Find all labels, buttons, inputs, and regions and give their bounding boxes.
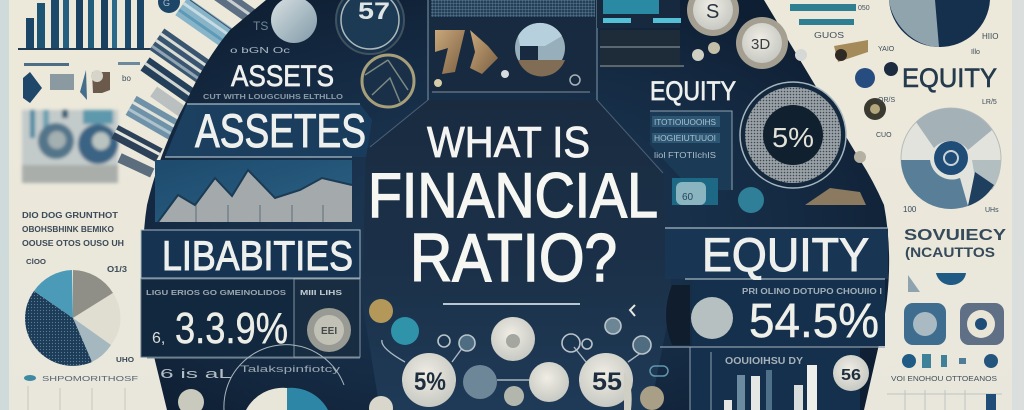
coin: 3D: 3D [751, 36, 770, 53]
value: 54.5%: 54.5% [749, 295, 879, 348]
lower left formula scribbles: 6 is aL [160, 366, 232, 381]
top right bars: GUOS [814, 31, 844, 40]
icons below dial [738, 151, 866, 213]
panel: equity list: HOGIEIUTUUOI [654, 134, 716, 143]
heading: small assets: ASSETS [231, 60, 334, 93]
heading: what is: WHAT IS [427, 118, 590, 167]
left notes text: ClOO [26, 259, 47, 266]
right solvency label: UHs [985, 207, 999, 214]
left line chart caption: SHPOMORITHOSF [42, 376, 138, 383]
amber coin [369, 299, 393, 323]
coin: S [687, 0, 739, 36]
left small icons: bo [122, 74, 131, 83]
panel: equity list: ITOTIOIUOOIHS [654, 118, 716, 127]
panel: 54.5 percent [660, 280, 885, 348]
top right pie: HIIO [982, 32, 998, 41]
coin: 56: 56 [841, 367, 861, 384]
main dark disc [143, 0, 889, 410]
right solvency label [903, 205, 1006, 260]
scribbles near assets [230, 19, 290, 55]
heading: right equity: EQUITY [902, 63, 997, 93]
right gauge diagram: LR/5 [982, 99, 997, 106]
panel: 3.3.9 percent: MIII LIHS [300, 290, 342, 297]
scribbles near assets: TS [253, 19, 268, 33]
icon: device: 60 [682, 192, 694, 203]
badge: 57 [336, 0, 404, 54]
coin: 55: 55 [592, 368, 622, 396]
coin: center top [491, 317, 535, 361]
left small icons [23, 62, 140, 103]
heading: assetes: ASSETES [195, 104, 366, 157]
left photo panel [22, 110, 118, 183]
coin: mid [529, 362, 569, 402]
value: 3.3.9%: 3.3.9% [175, 304, 288, 353]
icon: device [672, 178, 718, 205]
lower left pie [224, 345, 344, 410]
small coin bottom [504, 386, 524, 406]
top right bars [790, 4, 870, 40]
left notes text: OBOHSBHINK BEMIKO [22, 225, 114, 234]
icon: gold numerals [435, 30, 498, 74]
silver ball top [271, 0, 317, 43]
coin low left [178, 389, 393, 410]
coin: 5 percent [402, 353, 456, 407]
small glyph at top left [158, 0, 180, 13]
left line chart caption [24, 375, 138, 410]
left notes text: OOUSE OTOS OUSO UH [22, 239, 124, 248]
top right pie: Illo [971, 49, 980, 56]
panel: area chart [155, 160, 352, 222]
left notes text: DIO DOG GRUNTHOT [22, 211, 118, 220]
right gauge diagram: OR/S [878, 97, 895, 104]
right icon grid [887, 273, 1004, 410]
right solvency label: 100 [903, 205, 917, 214]
dial: 5 percent: 5% [772, 122, 814, 153]
icon: silver ball [691, 297, 733, 339]
divider under title [443, 303, 580, 305]
left notes text: O1/3 [107, 265, 128, 274]
small outlined coins [438, 318, 651, 354]
left notes text: UHO [116, 357, 135, 364]
icon: silver coin [307, 308, 351, 352]
scribbles near assets: o bGN Oc [230, 46, 290, 55]
heading: small equity: EQUITY [650, 76, 736, 106]
teal coin [391, 317, 419, 345]
connector lines [382, 340, 645, 380]
center hexagon backing [362, 100, 672, 410]
left bar chart [18, 0, 152, 50]
coin: 56 [833, 355, 869, 391]
panel: 3.3.9 percent: LIGU ERIOS GO GMEINOLIDOS [146, 290, 286, 297]
small light dots [692, 42, 807, 61]
coin: S: S [706, 1, 719, 23]
right gauge diagram: CUO [876, 132, 892, 139]
icon: globe [515, 23, 565, 76]
panel: 3.3.9 percent: 6, [152, 330, 165, 347]
lower right small icons [624, 285, 690, 410]
caption under assets: CUT WITH LOUGCUIHS ELTHLLO [203, 94, 344, 101]
heading: financial: FINANCIAL [368, 161, 658, 231]
coin: blue grey [463, 365, 497, 399]
panel: equity list [650, 111, 732, 190]
left pie chart [25, 270, 120, 366]
lower left formula scribbles [147, 358, 360, 381]
panel: top center [428, 0, 598, 100]
coin: 3D [736, 17, 788, 69]
left notes text [22, 211, 135, 364]
coin: 55 [579, 353, 633, 407]
right gauge diagram [876, 97, 1001, 209]
panel: equity list: liol FTOTIIchIS [654, 151, 716, 160]
top right pie [878, 0, 998, 56]
top right bars: 050 [858, 5, 870, 12]
icon: silver coin: EEI [321, 326, 337, 337]
right solvency label: (NCAUTTOS [905, 244, 995, 260]
right icon grid: VOI ENOHOU OTTOEANOS [891, 376, 997, 383]
right small icons [834, 40, 898, 120]
panel: 54.5 percent: PRI OLINO DOTUPO CHOUIIO I [742, 287, 882, 296]
coin: 5 percent: 5% [414, 368, 446, 396]
right solvency label: SOVUIECY [904, 227, 1006, 244]
top right pie: YAIO [878, 46, 895, 53]
lower right bar chart [690, 347, 860, 410]
panel: 3.3.9 percent [141, 279, 360, 357]
panel: top right teal [597, 0, 684, 68]
ring icon [362, 55, 414, 107]
dial: 5 percent [740, 82, 846, 188]
heading: equity big: EQUITY [702, 228, 869, 281]
panel: equity big [665, 228, 888, 281]
lower right bar chart: OOUIOIHSU DY [725, 356, 803, 367]
panel: assetes [165, 104, 372, 157]
panel: liabilities [141, 230, 360, 279]
heading: liabilities: LIBABITIES [162, 232, 353, 279]
fanned paper stack [111, 0, 273, 178]
lower left formula scribbles: Talakspinfiotcy [240, 364, 341, 374]
left notes text: 900 [98, 321, 116, 328]
heading: ratio: RATIO? [410, 220, 617, 296]
hexagon outline [370, 100, 663, 173]
